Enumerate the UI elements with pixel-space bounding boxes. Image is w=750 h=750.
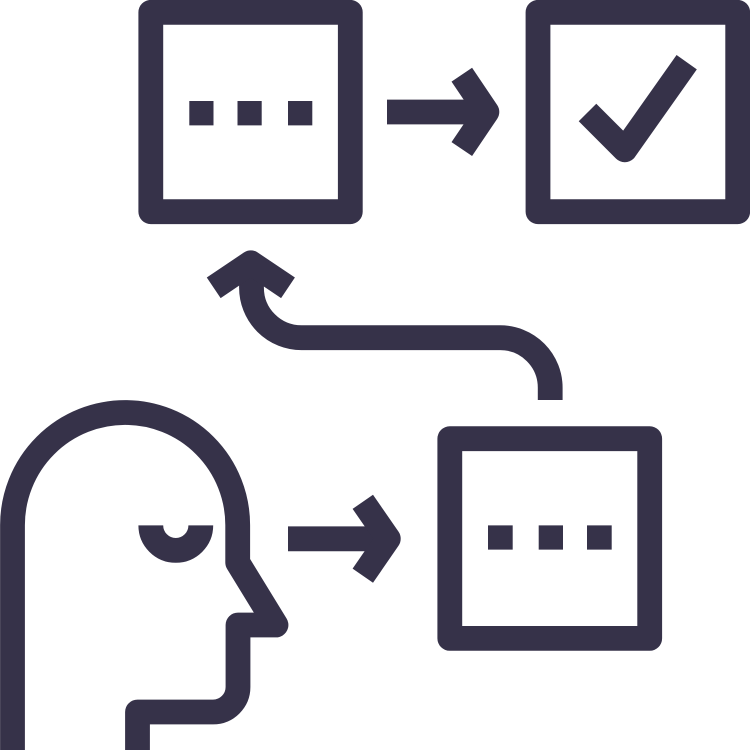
arrow: lower box back to top left box <box>214 263 550 400</box>
arrow: top left to checked box <box>387 75 487 149</box>
box: top left pending step <box>151 12 350 212</box>
box: top right completed step <box>538 12 738 212</box>
arrow: head to lower box <box>288 502 388 576</box>
icon: closed eye <box>151 525 201 550</box>
icon: head in profile <box>12 412 276 750</box>
box: lower pending step <box>450 439 650 638</box>
